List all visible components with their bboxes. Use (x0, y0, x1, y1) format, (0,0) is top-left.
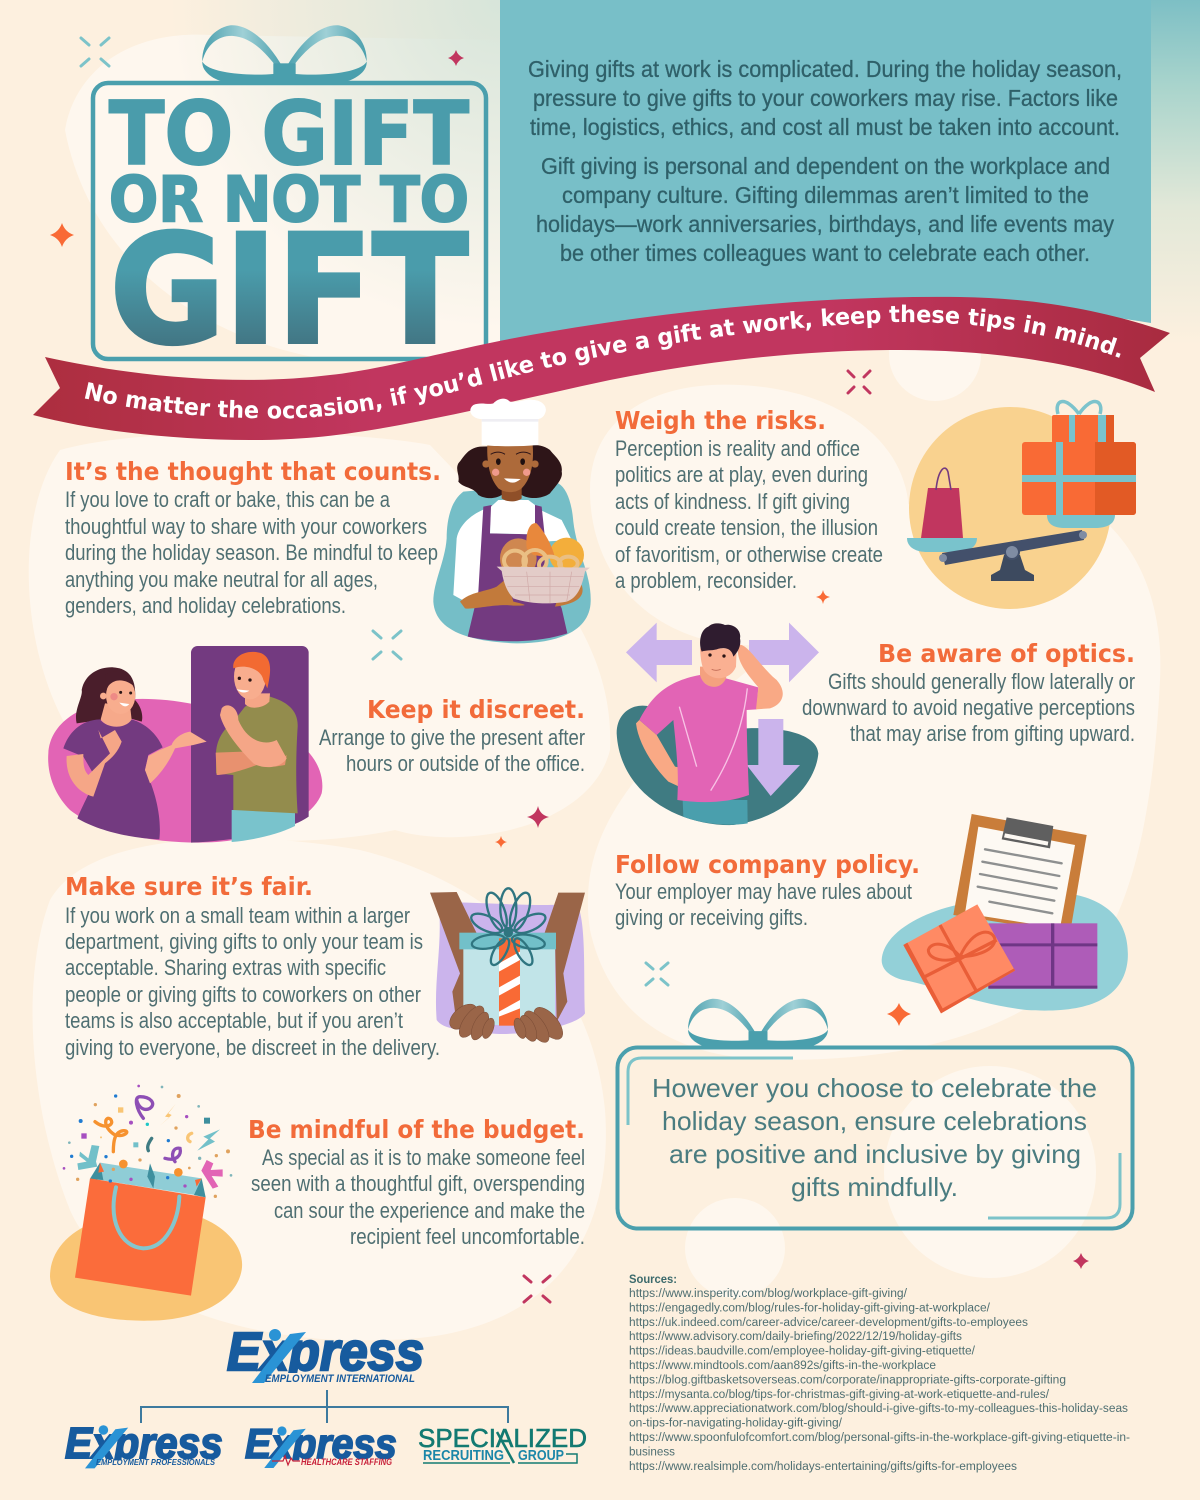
intro panel: Gift giving is personal and dependent on the workplace and (541, 153, 1110, 179)
logo: Express Employment International: Express (227, 1322, 424, 1382)
illustration: shopping bag with confetti (50, 1085, 242, 1321)
body text: teams is also acceptable, but if you aren’t (65, 1008, 403, 1033)
closing message: However you choose to celebrate the (652, 1073, 1097, 1103)
body text: recipient feel uncomfortable. (350, 1224, 585, 1249)
panel: make sure it's fair (65, 872, 585, 1060)
sources: https://www.advisory.com/daily-briefing/2022/12/19/holiday-gifts (629, 1331, 962, 1343)
logo: Express Employment Professionals: EMPLOYMENT PROFESSIONALS (96, 1457, 215, 1467)
body text: department, giving gifts to only your team is (65, 929, 423, 954)
sparkle: orange small (816, 590, 830, 604)
intro panel (500, 0, 1151, 345)
body text: hours or outside of the office. (346, 751, 585, 776)
illustration: man with arrows (617, 623, 819, 825)
logo: Specialized Recruiting Group: RECRUITING (423, 1448, 504, 1464)
title frame (93, 83, 486, 359)
sparkle: title teal (81, 38, 109, 66)
banner ribbon: No matter the occasion, if you’d like to give a gift at work, keep these tips in mind. (84, 304, 1121, 419)
illustration: chef with bread basket (433, 399, 591, 643)
panel: weigh the risks (615, 402, 1136, 609)
org chart connector (141, 1390, 508, 1423)
sparkle: crimson under banner (848, 371, 870, 393)
body text: politics are at play, even during (615, 462, 868, 487)
heading: Keep it discreet. (367, 695, 585, 724)
sources: https://www.appreciationatwork.com/blog/should-i-give-gifts-to-my-colleagues-this-holiday-seas (629, 1403, 1128, 1415)
panel: follow company policy (615, 814, 1128, 1013)
sparkle: teal right (646, 963, 668, 985)
title text: OR NOT TO (109, 163, 469, 236)
intro panel: holidays—work anniversaries, birthdays, and life events may (536, 211, 1114, 237)
sparkle: orange middle (495, 836, 507, 848)
heading: Make sure it’s fair. (65, 872, 313, 901)
body text: that may arise from gifting upward. (850, 721, 1135, 746)
title text: TO GIFT (109, 83, 469, 185)
body text (615, 436, 883, 593)
body text: during the holiday season. Be mindful to keep (65, 540, 438, 565)
body text: Arrange to give the present after (319, 725, 585, 750)
body text: thoughtful way to share with your coworkers (65, 514, 427, 539)
logo: Specialized Recruiting Group: GROUP (518, 1448, 564, 1464)
logo: Specialized Recruiting Group: SPECIALIZED (418, 1423, 587, 1453)
logo: Express Employment International: EMPLOYMENT INTERNATIONAL (265, 1373, 415, 1385)
body text: acceptable. Sharing extras with specific (65, 955, 386, 980)
panel: keep it discreet (48, 646, 585, 843)
closing message: holiday season, ensure celebrations (662, 1106, 1087, 1136)
sources: https://www.mindtools.com/aan892s/gifts-in-the-workplace (629, 1360, 936, 1372)
body text: downward to avoid negative perceptions (802, 695, 1135, 720)
sources: https://engagedly.com/blog/rules-for-holiday-gift-giving-at-workplace/ (629, 1302, 991, 1314)
logo family (65, 1322, 587, 1468)
title text: GIFT (110, 204, 468, 378)
sources: on-tips-for-navigating-holiday-gift-giving/ (629, 1418, 843, 1430)
sources: https://uk.indeed.com/career-advice/career-development/gifts-to-employees (629, 1317, 1028, 1329)
sparkle: crimson top (448, 50, 464, 66)
sources: https://mysanta.co/blog/tips-for-christmas-gift-giving-at-work-etiquette-and-rules/ (629, 1389, 1050, 1401)
closing message: are positive and inclusive by giving (669, 1139, 1081, 1169)
sparkle: orange right (887, 1003, 911, 1026)
body text: could create tension, the illusion (615, 515, 878, 540)
illustration: scale weighing gifts (907, 402, 1136, 609)
sparkle: crimson middle (527, 806, 549, 828)
body text: anything you make neutral for all ages, (65, 567, 378, 592)
heading: It’s the thought that counts. (65, 457, 441, 486)
sources: https://www.insperity.com/blog/workplace-gift-giving/ (629, 1288, 908, 1300)
body text (802, 669, 1135, 746)
body text: Your employer may have rules about (615, 879, 912, 904)
sparkle: crimson bottom left (524, 1276, 550, 1302)
body text (65, 487, 438, 618)
body text: If you love to craft or bake, this can be a (65, 487, 391, 512)
closing message: gifts mindfully. (791, 1172, 958, 1202)
body text: seen with a thoughtful gift, overspending (251, 1171, 585, 1196)
logo: Express Employment Professionals: Express (65, 1420, 223, 1468)
sources: Sources: (629, 1274, 677, 1286)
body text: As special as it is to make someone feel (262, 1145, 585, 1170)
body text: giving or receiving gifts. (615, 905, 808, 930)
illustration: clipboard and gifts (882, 814, 1128, 1013)
icon: ribbon bow (688, 999, 828, 1048)
closing frame (618, 1048, 1132, 1228)
sources: https://www.realsimple.com/holidays-entertaining/gifts/gifts-for-employees (629, 1461, 1017, 1473)
sources (629, 1274, 1130, 1473)
intro panel: company culture. Gifting dilemmas aren’t limited to the (562, 182, 1089, 208)
panel: be aware of optics (617, 623, 1135, 825)
body text: Perception is reality and office (615, 436, 860, 461)
body text (251, 1145, 585, 1249)
heading: Be mindful of the budget. (248, 1115, 585, 1144)
body text: Gifts should generally flow laterally or (828, 669, 1135, 694)
closing message (652, 1073, 1097, 1202)
body text (615, 879, 912, 930)
sources: https://blog.giftbasketsoverseas.com/corporate/inappropriate-gifts-corporate-gifting (629, 1374, 1066, 1386)
heading: Follow company policy. (615, 850, 920, 879)
body text: genders, and holiday celebrations. (65, 593, 346, 618)
sources: business (629, 1446, 675, 1458)
logo: Express Healthcare Staffing: HEALTHCARE STAFFING (301, 1457, 392, 1467)
sparkle: teal middle (373, 631, 401, 659)
intro panel: time, logistics, ethics, and cost all must be taken into account. (530, 114, 1120, 140)
sources: https://www.spoonfulofcomfort.com/blog/personal-gifts-in-the-workplace-gift-giving-etiquette-in- (629, 1432, 1130, 1444)
body text: acts of kindness. If gift giving (615, 489, 850, 514)
inner corner accents (628, 1058, 1120, 1218)
sparkle: crimson bottom right (1073, 1253, 1089, 1269)
panel: budget (50, 1085, 585, 1321)
intro panel: pressure to give gifts to your coworkers may rise. Factors like (533, 85, 1118, 111)
logo: Express Healthcare Staffing: Express (245, 1420, 397, 1467)
sources: https://ideas.baudville.com/employee-holiday-gift-giving-etiquette/ (629, 1346, 976, 1358)
sparkle: orange left (50, 223, 74, 247)
body text: of favoritism, or otherwise create (615, 542, 883, 567)
heading: Weigh the risks. (615, 406, 826, 435)
body text (319, 725, 585, 776)
title text (109, 83, 469, 378)
icon: ribbon bow (202, 25, 367, 83)
body text: giving to everyone, be discreet in the delivery. (65, 1035, 440, 1060)
heading: Be aware of optics. (878, 639, 1135, 668)
body text: a problem, reconsider. (615, 568, 797, 593)
intro panel: be other times colleagues want to celebrate each other. (560, 240, 1090, 266)
illustration: two coworkers talking (48, 646, 322, 843)
body text (65, 903, 440, 1060)
intro panel: Giving gifts at work is complicated. During the holiday season, (528, 56, 1122, 82)
closing gift box (618, 999, 1132, 1228)
body text: people or giving gifts to coworkers on other (65, 982, 421, 1007)
illustration: hands holding gift (430, 888, 585, 1046)
body text: If you work on a small team within a larger (65, 903, 410, 928)
title gift box (93, 25, 486, 378)
body text: can sour the experience and make the (274, 1198, 585, 1223)
panel: the thought that counts (65, 399, 591, 643)
